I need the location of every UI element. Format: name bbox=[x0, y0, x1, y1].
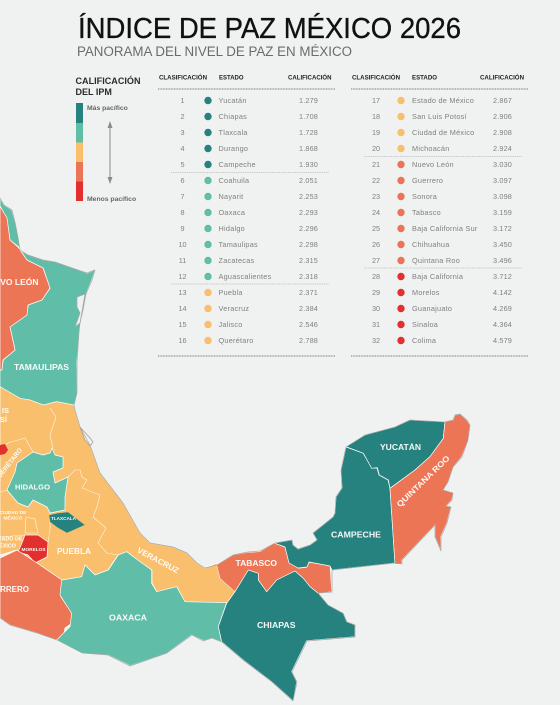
label: San Luis Potosí: SÍ bbox=[0, 415, 8, 424]
lagoon near Tamaulipas coast bbox=[75, 294, 85, 327]
rows: 27 bbox=[372, 256, 380, 265]
rows: 3.172 bbox=[493, 224, 512, 233]
rows: 4.579 bbox=[493, 336, 512, 345]
rows: Morelos bbox=[412, 288, 440, 297]
state: Guerrero bbox=[0, 550, 72, 640]
rows: 32 bbox=[372, 336, 380, 345]
ranking table: positions 1 to 16 bbox=[158, 72, 335, 356]
rows: 2.253 bbox=[299, 192, 318, 201]
rows: Aguascalientes bbox=[218, 272, 272, 281]
rows: Oaxaca bbox=[218, 208, 246, 217]
label: Oaxaca: OAXACA bbox=[109, 614, 147, 622]
rows: 4.269 bbox=[493, 304, 512, 313]
rows: 2.315 bbox=[299, 256, 318, 265]
rows: 19 bbox=[372, 128, 380, 137]
label: Tamaulipas: TAMAULIPAS bbox=[14, 362, 69, 372]
rows: Hidalgo bbox=[218, 224, 245, 233]
rows: Michoacán bbox=[412, 144, 450, 153]
rows: 2.318 bbox=[299, 272, 318, 281]
rows: 16 bbox=[178, 336, 187, 345]
rows: 14 bbox=[178, 304, 187, 313]
rows: 24 bbox=[372, 208, 380, 217]
rows: 2.298 bbox=[299, 240, 318, 249]
rows: 5 bbox=[180, 160, 185, 169]
rows: 1.279 bbox=[299, 96, 318, 105]
rows: 2.384 bbox=[299, 304, 318, 313]
table header bbox=[159, 72, 332, 82]
rows: 10 bbox=[178, 240, 187, 249]
rows: 13 bbox=[178, 288, 187, 297]
coastline bbox=[0, 198, 470, 701]
rows: Quintana Roo bbox=[412, 256, 460, 265]
rows: Veracruz bbox=[218, 304, 249, 313]
rows: Jalisco bbox=[218, 320, 243, 329]
label: San Luis Potosí: IS bbox=[2, 406, 9, 415]
legend label: least peaceful: Menos pacífico bbox=[87, 196, 136, 203]
subtitle: PANORAMA DEL NIVEL DE PAZ EN MÉXICO bbox=[77, 44, 352, 59]
rows: 9 bbox=[180, 224, 185, 233]
state: Morelos bbox=[18, 535, 48, 563]
rows: Coahuila bbox=[218, 176, 250, 185]
rows: 29 bbox=[372, 288, 380, 297]
rows: 3.030 bbox=[493, 160, 512, 169]
state: Campeche bbox=[274, 447, 395, 570]
rows: 1 bbox=[180, 96, 185, 105]
rows bbox=[178, 96, 318, 345]
table header: CALIFICACIÓN bbox=[480, 72, 524, 82]
rows: 2.908 bbox=[493, 128, 512, 137]
label: Ciudad de México: CIUDAD DE bbox=[0, 511, 26, 516]
label: Yucatán: YUCATÁN bbox=[380, 443, 421, 452]
rows: Puebla bbox=[218, 288, 243, 297]
rows: 2.293 bbox=[299, 208, 318, 217]
state: Yucatán bbox=[346, 420, 445, 488]
label: Ciudad de México: MÉXICO bbox=[4, 514, 23, 522]
state: Tamaulipas bbox=[0, 198, 95, 405]
rows: 4.364 bbox=[493, 320, 512, 329]
yellow state borders bbox=[0, 408, 118, 555]
title: ÍNDICE DE PAZ MÉXICO 2026 bbox=[78, 12, 461, 45]
rows: Estado de México bbox=[412, 96, 474, 105]
rows: Tamaulipas bbox=[218, 240, 258, 249]
rows: Durango bbox=[218, 144, 248, 153]
rows: 6 bbox=[180, 176, 185, 185]
rows: 20 bbox=[372, 144, 380, 153]
rows: 2.371 bbox=[299, 288, 318, 297]
state group: San Luis Potosí, Querétaro, Veracruz, Puebla (yellow) bbox=[0, 385, 235, 603]
rows: Nuevo León bbox=[412, 160, 454, 169]
rows: 2.296 bbox=[299, 224, 318, 233]
rows: 2.546 bbox=[299, 320, 318, 329]
rows bbox=[372, 96, 512, 345]
label: Puebla: PUEBLA bbox=[57, 547, 91, 556]
state: Oaxaca bbox=[57, 552, 227, 666]
state: Guanajuato bbox=[0, 444, 8, 455]
table header: CALIFICACIÓN bbox=[288, 72, 332, 82]
table header: ESTADO bbox=[412, 74, 437, 82]
rows: 25 bbox=[372, 224, 380, 233]
legend arrow bbox=[108, 121, 112, 184]
rows: 8 bbox=[180, 208, 185, 217]
rows: 2.906 bbox=[493, 112, 512, 121]
rows: 11 bbox=[179, 256, 186, 265]
rows: Querétaro bbox=[218, 336, 254, 345]
legend heading: DEL IPM bbox=[76, 87, 112, 97]
legend label: most peaceful: Más pacífico bbox=[87, 105, 128, 112]
rows: Chihuahua bbox=[412, 240, 450, 249]
legend heading: CALIFICACIÓN bbox=[76, 75, 140, 86]
rows: 1.930 bbox=[299, 160, 318, 169]
legend bbox=[76, 75, 140, 203]
rows: 1.728 bbox=[299, 128, 318, 137]
rows: 3 bbox=[180, 128, 185, 137]
rows: 3.496 bbox=[493, 256, 512, 265]
map labels bbox=[0, 276, 452, 630]
label: Hidalgo: HIDALGO bbox=[15, 482, 50, 492]
rows: 2.788 bbox=[299, 336, 318, 345]
label: Tlaxcala: TLAXCALA bbox=[51, 516, 76, 521]
rows: Sonora bbox=[412, 192, 438, 201]
label: Chiapas: CHIAPAS bbox=[257, 621, 296, 630]
state: Nuevo León bbox=[0, 206, 50, 370]
rows: 26 bbox=[372, 240, 380, 249]
rows: 3.098 bbox=[493, 192, 512, 201]
rows: 1.868 bbox=[299, 144, 318, 153]
rows: Baja California Sur bbox=[412, 224, 478, 233]
rows: 2.051 bbox=[299, 176, 318, 185]
rows: Ciudad de México bbox=[412, 128, 474, 137]
map of Mexico by state bbox=[0, 198, 470, 701]
rows: 21 bbox=[372, 160, 380, 169]
rows: Sinaloa bbox=[412, 320, 439, 329]
state: Tabasco bbox=[217, 543, 332, 593]
label: Morelos: MORELOS bbox=[22, 547, 46, 553]
rows: Campeche bbox=[218, 160, 256, 169]
state: Chiapas bbox=[218, 570, 355, 701]
rows: 15 bbox=[178, 320, 187, 329]
label: Tabasco: TABASCO bbox=[236, 559, 277, 568]
rows: 3.712 bbox=[493, 272, 512, 281]
lagoon near Veracruz coast bbox=[80, 427, 93, 446]
table header bbox=[352, 72, 524, 82]
table header: CLASIFICACIÓN bbox=[159, 72, 207, 82]
rows: 3.159 bbox=[493, 208, 512, 217]
rows: Baja California bbox=[412, 272, 464, 281]
state: Tlaxcala bbox=[49, 512, 85, 533]
state: Hidalgo bbox=[7, 448, 68, 513]
rows: 7 bbox=[180, 192, 185, 201]
rows: San Luis Potosí bbox=[412, 112, 467, 121]
label: Quintana Roo: QUINTANA ROO bbox=[395, 454, 452, 509]
rows: Guerrero bbox=[412, 176, 443, 185]
rows: 2.867 bbox=[493, 96, 512, 105]
state: Quintana Roo bbox=[390, 414, 470, 564]
rows: 3.097 bbox=[493, 176, 512, 185]
rows: 4.142 bbox=[493, 288, 512, 297]
rows: 23 bbox=[372, 192, 380, 201]
rows: 1.708 bbox=[299, 112, 318, 121]
rows: 18 bbox=[372, 112, 380, 121]
rows: 2 bbox=[180, 112, 185, 121]
table header: ESTADO bbox=[219, 74, 244, 82]
ranking table: positions 17 to 32 bbox=[351, 72, 528, 356]
rows: 17 bbox=[372, 96, 380, 105]
rows: 28 bbox=[372, 272, 380, 281]
rows: Yucatán bbox=[218, 96, 247, 105]
legend colour scale bbox=[76, 103, 83, 201]
rows: Tlaxcala bbox=[218, 128, 248, 137]
label: Veracruz: VERACRUZ bbox=[136, 546, 181, 575]
rows: Tabasco bbox=[412, 208, 441, 217]
rows: Zacatecas bbox=[218, 256, 255, 265]
rows: 30 bbox=[372, 304, 380, 313]
rows: Nayarit bbox=[218, 192, 243, 201]
rows: 31 bbox=[372, 320, 380, 329]
rows: Guanajuato bbox=[412, 304, 452, 313]
rows: 2.924 bbox=[493, 144, 512, 153]
label: Campeche: CAMPECHE bbox=[331, 530, 382, 540]
table header: CLASIFICACIÓN bbox=[352, 72, 400, 82]
rows: 4 bbox=[180, 144, 185, 153]
rows: 12 bbox=[178, 272, 187, 281]
rows: 22 bbox=[372, 176, 380, 185]
rows: 3.450 bbox=[493, 240, 512, 249]
rows: Chiapas bbox=[218, 112, 247, 121]
rows: Colima bbox=[412, 336, 437, 345]
